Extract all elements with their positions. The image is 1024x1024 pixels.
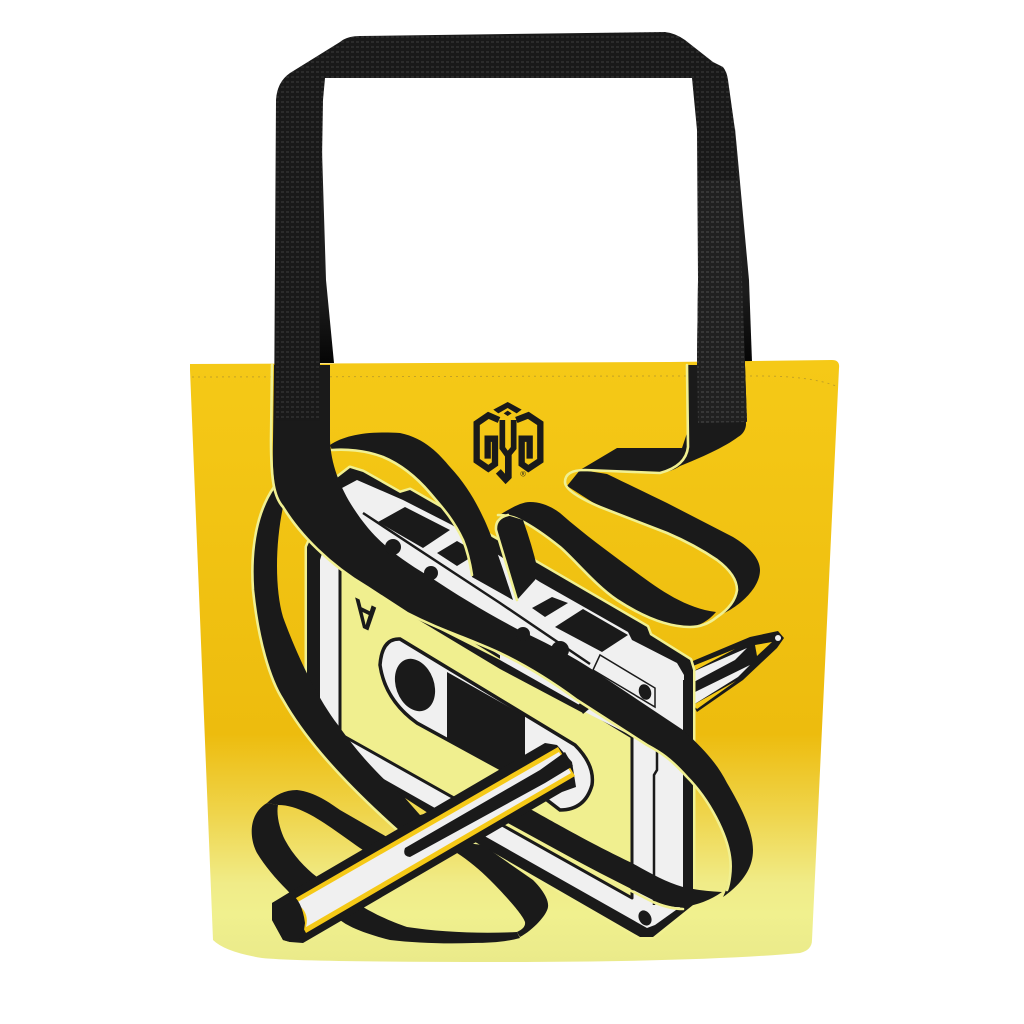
pen tip yellow sliver lower	[693, 681, 736, 709]
left ribbon loop	[252, 487, 440, 830]
back strap right	[735, 128, 752, 362]
cassette glow outline	[307, 468, 693, 937]
short ribbon over cassette	[496, 515, 537, 600]
main ribbon bump four	[551, 641, 569, 659]
pen tip barrel lower	[693, 665, 750, 705]
corner plate	[593, 655, 655, 707]
main ribbon highlight	[271, 365, 731, 890]
main ribbon bump three	[516, 627, 530, 641]
window pill	[380, 639, 592, 810]
stitching	[192, 376, 836, 386]
lip clip notch	[578, 697, 589, 714]
pen tip behind cassette	[688, 631, 784, 712]
tape ribbon: right outer loop	[567, 470, 760, 616]
bottom loop ribbon	[252, 790, 548, 943]
registered mark: ®	[520, 470, 526, 479]
tape ribbon highlight edge	[498, 365, 737, 627]
tape ribbon: right upper band	[580, 365, 746, 473]
pen tip barrel upper	[690, 648, 747, 684]
pen end cap	[272, 893, 305, 942]
front strap and top handle	[274, 32, 747, 423]
loop bottom arc	[300, 877, 520, 943]
pen white body	[296, 752, 571, 927]
back strap left	[316, 150, 334, 363]
upper lip strip	[500, 655, 632, 736]
top window third	[532, 597, 568, 617]
short ribbon highlight	[496, 515, 517, 600]
pen tip yellow sliver upper	[688, 649, 735, 673]
pen tip ball	[775, 635, 781, 641]
main ribbon bump one	[385, 539, 401, 555]
corner screw	[637, 682, 653, 702]
top window small	[437, 541, 478, 566]
lower ribbon to right tip	[490, 800, 722, 909]
main ribbon	[271, 365, 753, 897]
top window right	[555, 609, 628, 652]
right black edge	[683, 680, 693, 905]
top groove	[363, 513, 590, 664]
loop highlight	[332, 450, 472, 575]
upper lip line	[407, 613, 583, 713]
bottom curl	[440, 840, 548, 937]
logo	[477, 402, 540, 479]
tape window	[447, 672, 525, 770]
right seam	[654, 745, 657, 905]
long pen	[272, 743, 576, 943]
left ribbon highlight	[252, 487, 397, 830]
right strap lighter weave	[697, 180, 747, 423]
bottom screw	[636, 908, 654, 928]
loop top strip	[267, 790, 440, 880]
main ribbon bump two	[424, 566, 438, 580]
pen tip yellow cone	[755, 642, 772, 656]
loop left strip	[252, 803, 350, 921]
pen yellow trim	[289, 747, 575, 933]
top window left	[378, 507, 450, 548]
face label	[340, 560, 632, 898]
pen casing	[272, 743, 576, 943]
reel hole	[388, 653, 442, 717]
lower ribbon highlight	[505, 823, 683, 909]
pen slot	[404, 752, 573, 857]
label A: A	[354, 589, 377, 644]
upper loop ribbon	[330, 432, 513, 600]
cassette	[307, 468, 693, 937]
yellow gap by pen	[405, 798, 428, 815]
cassette black body	[307, 468, 693, 937]
tape ribbon: right inner strip	[498, 502, 716, 627]
bag body	[190, 360, 839, 962]
cassette white shell	[320, 480, 684, 928]
pen tip casing	[688, 631, 784, 712]
